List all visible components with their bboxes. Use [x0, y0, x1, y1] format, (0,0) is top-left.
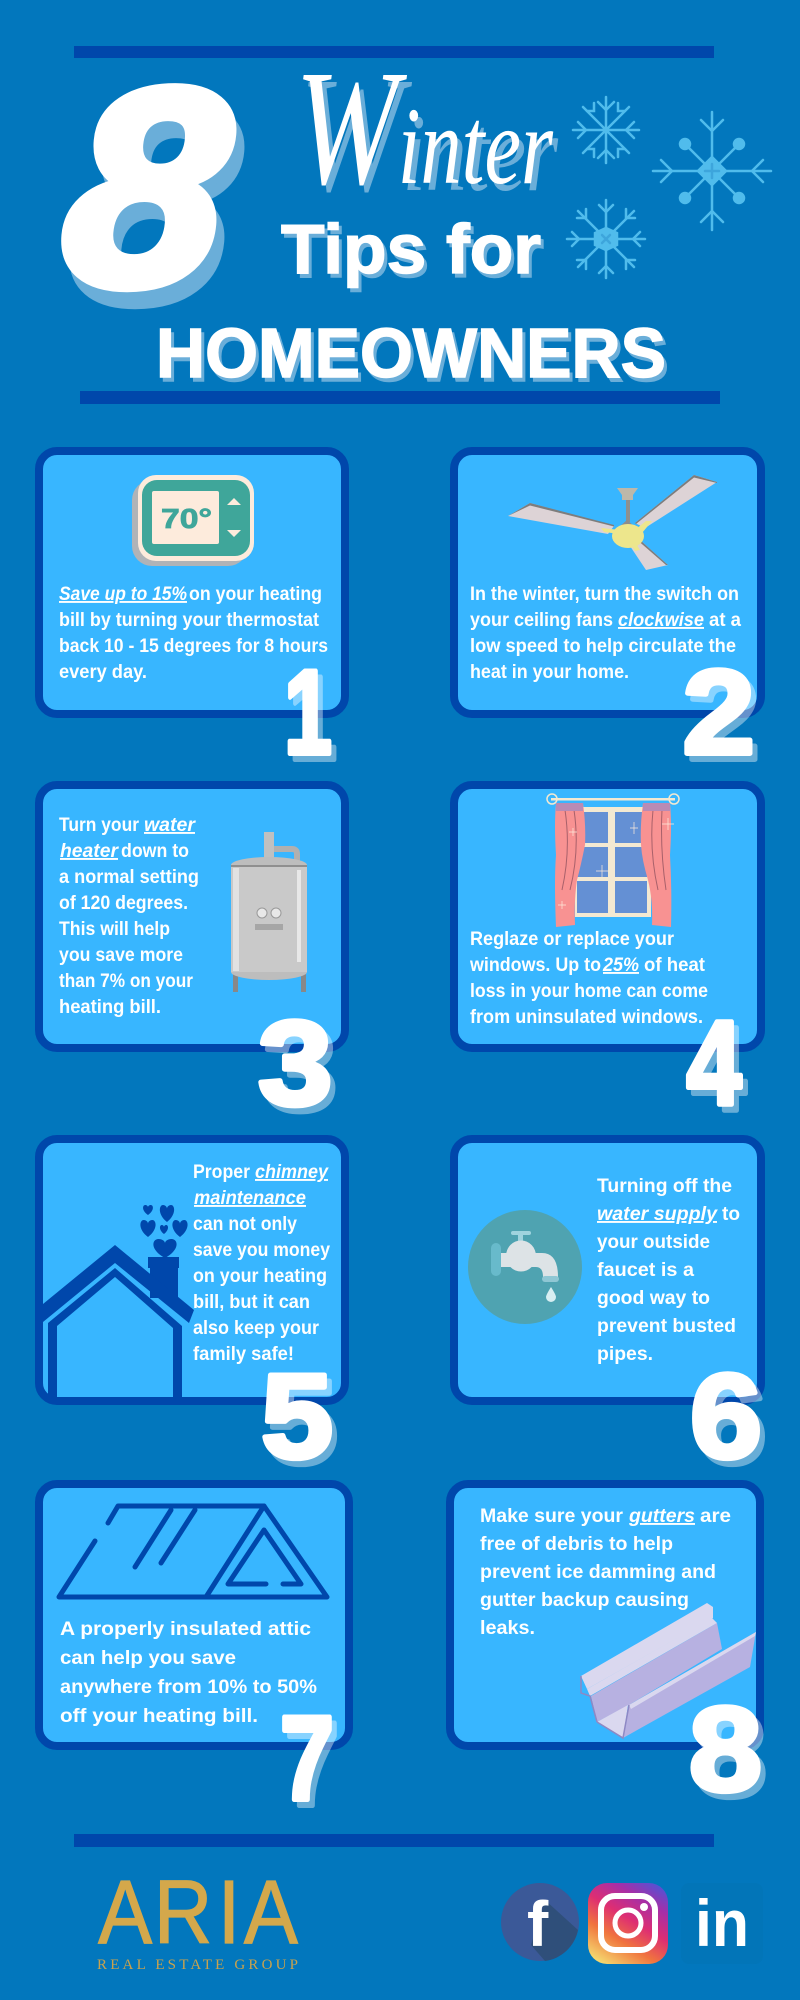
tip 3 text: of 120 degrees. [59, 893, 188, 914]
tip 2 text [470, 584, 741, 683]
tip 7 text: off your heating bill. [60, 1706, 258, 1727]
panel: tip 6 [454, 1139, 767, 1490]
tip 2 text: at a [709, 610, 741, 631]
tip 6 text: faucet is a [597, 1260, 694, 1281]
tip 2 text: In the winter, turn the switch on [470, 584, 739, 605]
tip 6 text: water supply [597, 1204, 718, 1225]
tip 7 text: can help you save [60, 1648, 236, 1669]
tip 3 text [59, 815, 199, 1018]
number 8: 8 [694, 1688, 767, 1822]
tip 4 text [469, 929, 708, 1028]
tip 3 text: a normal setting [59, 867, 199, 888]
panel: tip 3 [39, 785, 345, 1136]
icon: window with curtains [547, 794, 679, 927]
icon: thermostat [132, 475, 254, 566]
panel: tip 1 [39, 451, 345, 786]
panel: tip 7 [39, 1484, 349, 1832]
tip 1 text [59, 584, 328, 683]
icon: facebook [501, 1883, 579, 1961]
title: HOMEOWNERS: HOMEOWNERS [156, 314, 666, 392]
card 7 background [39, 1484, 349, 1746]
number 3: 3 [263, 1002, 338, 1136]
tip 1 text: bill by turning your thermostat [59, 610, 320, 631]
icon: thermostat: 70° [161, 503, 212, 534]
logo: ARIA Real Estate Group: REAL ESTATE GROUP [97, 1957, 298, 1973]
tip 4 text: loss in your home can come [470, 981, 708, 1002]
number 6: 6 [695, 1356, 767, 1490]
tip 5 text: maintenance [194, 1188, 306, 1209]
number 8: 8 [689, 1682, 762, 1816]
tip 5 text: bill, but it can [193, 1292, 310, 1313]
tip 5 text [193, 1162, 330, 1365]
tip 3 text: down to [121, 841, 189, 862]
tip 5 text: chimney [255, 1162, 329, 1183]
card 6 background [454, 1139, 761, 1401]
icon: house with chimney and hearts [43, 1205, 194, 1397]
tip 8 text: prevent ice damming and [480, 1562, 716, 1583]
tip 1 text: every day. [59, 662, 147, 683]
card 2 background [454, 451, 761, 714]
number 1: 1 [284, 646, 332, 780]
title: Tips for: Tips for [281, 210, 541, 288]
tip 2 text: your ceiling fans [470, 610, 613, 631]
title: Winter: Winter [300, 43, 559, 226]
tip 3 text: water [144, 815, 197, 836]
tip 4 text: Reglaze or replace your [470, 929, 675, 950]
tip 5 text: on your heating [193, 1266, 327, 1287]
number 4: 4 [686, 996, 742, 1130]
tip 8 text: gutters [628, 1506, 695, 1527]
tip 8 text: free of debris to help [480, 1534, 673, 1555]
icon: snowflake small [573, 97, 639, 163]
panel: tip 2 [454, 451, 761, 786]
title: big 8: 8 [54, 31, 242, 344]
number 7: 7 [285, 1698, 339, 1832]
tip 1 text: back 10 - 15 degrees for 8 hours [59, 636, 328, 657]
tip 4 text: 25% [602, 955, 639, 976]
tip 6 text: prevent busted [597, 1316, 736, 1337]
title: big 8: 8 [62, 48, 250, 361]
icon: linkedin: in [695, 1886, 749, 1960]
tip 7 text [60, 1619, 317, 1727]
tip 6 text [597, 1176, 740, 1365]
icon: ceiling fan [508, 475, 717, 570]
tip 1 text: Save up to 15% [59, 584, 187, 605]
icon: faucet [468, 1210, 582, 1324]
tip 8 text: gutter backup causing [480, 1590, 689, 1611]
card 1 background [39, 451, 345, 714]
footer divider bar [74, 1834, 714, 1847]
card 4 background [454, 785, 761, 1048]
card 8 background [450, 1484, 760, 1746]
tip 8 text: leaks. [480, 1618, 535, 1639]
tip 6 text: pipes. [597, 1344, 653, 1365]
divider bar under title [80, 391, 720, 404]
number 4: 4 [692, 1002, 747, 1136]
number 2: 2 [682, 646, 755, 780]
number 3: 3 [258, 996, 332, 1130]
tip 1 text: on your heating [189, 584, 322, 605]
tip 3 text: heating bill. [59, 997, 161, 1018]
tip 7 text: A properly insulated attic [60, 1619, 311, 1640]
panel: tip 5 [39, 1139, 345, 1490]
icon: snowflake large [653, 112, 771, 230]
tip 6 text: to [722, 1204, 740, 1225]
icon: facebook: f [527, 1888, 549, 1960]
icon: gutter [581, 1603, 756, 1738]
tip 3 text: than 7% on your [59, 971, 194, 992]
tip 3 text: Turn your [59, 815, 140, 836]
tip 6 text: Turning off the [597, 1176, 732, 1197]
icon: water heater [231, 832, 307, 992]
tip 4 text: of heat [644, 955, 706, 976]
card 5 background [39, 1139, 345, 1401]
icon: instagram [588, 1883, 668, 1964]
top divider bar [74, 46, 714, 58]
tip 5 text: Proper [193, 1162, 251, 1183]
tip 3 text: you save more [59, 945, 183, 966]
tip 4 text: from uninsulated windows. [470, 1007, 703, 1028]
number 7: 7 [280, 1692, 334, 1826]
title: Tips for: Tips for [284, 214, 544, 292]
icon: linkedin [681, 1883, 763, 1964]
title: Winter: Winter [295, 36, 554, 219]
tip 2 text: low speed to help circulate the [470, 636, 736, 657]
tip 2 text: clockwise [618, 610, 704, 631]
number 5: 5 [261, 1350, 333, 1484]
number 5: 5 [266, 1356, 338, 1490]
title: HOMEOWNERS: HOMEOWNERS [159, 318, 669, 396]
tip 5 text: can not only [193, 1214, 297, 1235]
tip 6 text: good way to [597, 1288, 710, 1309]
number 6: 6 [690, 1350, 762, 1484]
panel: tip 4 [454, 785, 761, 1136]
panel: tip 8 [450, 1484, 767, 1822]
tip 3 text: This will help [59, 919, 170, 940]
tip 2 text: heat in your home. [470, 662, 629, 683]
tip 5 text: save you money [193, 1240, 330, 1261]
tip 3 text: heater [60, 841, 120, 862]
number 2: 2 [688, 652, 760, 786]
card 3 background [39, 785, 345, 1048]
tip 8 text: Make sure your [480, 1506, 624, 1527]
tip 8 text: are [700, 1506, 731, 1527]
tip 7 text: anywhere from 10% to 50% [60, 1677, 317, 1698]
tip 4 text: windows. Up to [469, 955, 601, 976]
logo: ARIA Real Estate Group: ARIA [98, 1862, 298, 1963]
tip 6 text: your outside [597, 1232, 710, 1253]
number 1: 1 [289, 652, 337, 786]
tip 8 text [480, 1506, 731, 1639]
icon: attic [59, 1506, 327, 1597]
icon: snowflake medium [567, 200, 645, 278]
tip 5 text: also keep your [193, 1318, 320, 1339]
tip 5 text: family safe! [193, 1344, 294, 1365]
